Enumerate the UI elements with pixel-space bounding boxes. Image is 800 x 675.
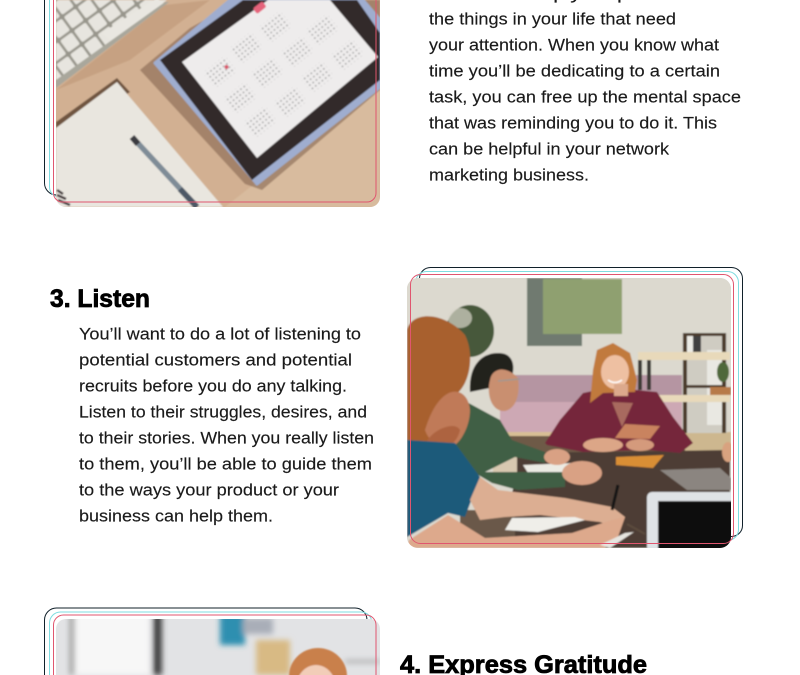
text block: listen paragraph: to them, you’ll be able to guide them <box>79 454 372 474</box>
text block: listen paragraph: Listen to their struggles, desires, and <box>79 402 367 422</box>
text block: time blocking paragraph: task, you can free up the mental space <box>429 88 741 106</box>
text block: listen paragraph <box>79 324 374 526</box>
woman photo <box>56 619 380 675</box>
text block: time blocking paragraph: the things in your life that need <box>429 10 676 28</box>
panel: team meeting photo <box>400 268 742 555</box>
text block: listen paragraph: to their stories. When you really listen <box>79 428 374 448</box>
pink frame outline <box>410 274 734 544</box>
text block: time blocking paragraph: can be helpful in your network <box>429 140 670 158</box>
meeting photo <box>407 278 731 548</box>
text block: time blocking paragraph: marketing business. <box>429 166 589 184</box>
text block: listen paragraph: potential customers and potential <box>79 350 352 370</box>
heading: 3. Listen: 3. Listen <box>50 285 150 313</box>
text block: time blocking paragraph <box>429 0 741 184</box>
panel: smiling woman photo <box>44 608 380 675</box>
calendar photo <box>50 0 385 212</box>
text block: listen paragraph: to the ways your product or your <box>79 480 339 500</box>
pink frame outline <box>54 0 376 202</box>
panel: tablet calendar photo <box>44 0 385 212</box>
text block: listen paragraph: recruits before you do any talking. <box>79 376 347 396</box>
photo frame outlines <box>416 268 742 540</box>
photo frame outlines <box>44 608 372 675</box>
text block: listen paragraph: You’ll want to do a lot of listening to <box>79 324 361 344</box>
photo frame outlines <box>44 0 70 197</box>
text block: time blocking paragraph: your attention. When you know what <box>429 36 719 54</box>
pink frame outline <box>54 615 376 675</box>
text block: listen paragraph: business can help them. <box>79 506 273 526</box>
text block: time blocking paragraph: that was reminding you to do it. This <box>429 114 717 132</box>
text block: time blocking paragraph: time you’ll be dedicating to a certain <box>429 62 720 80</box>
